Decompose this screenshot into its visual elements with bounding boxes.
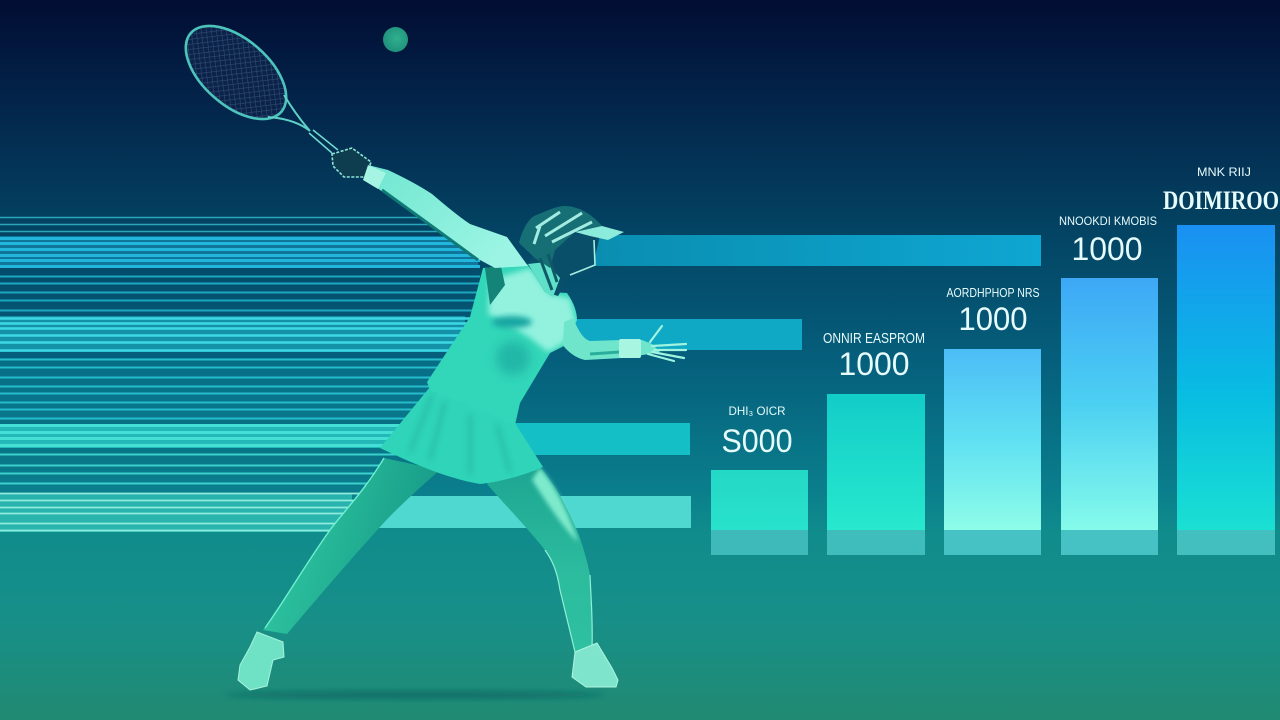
face edge [570, 240, 595, 275]
column 4 [1061, 278, 1158, 555]
tennis ball [383, 27, 408, 52]
ground shadow [225, 691, 605, 699]
wristband [619, 339, 641, 358]
visor [575, 226, 624, 240]
torso [427, 262, 577, 425]
column 1 label: S000 [722, 423, 792, 459]
column 2 label: ONNIR EASPROM [823, 330, 925, 347]
column 1 label [722, 404, 792, 459]
column 4 label [1059, 214, 1157, 267]
column 5 label: MNK RIIJ [1197, 165, 1251, 179]
front shoe [572, 643, 618, 687]
skirt [380, 387, 543, 484]
column 3 label: AORDHPHOP NRS [946, 285, 1040, 300]
front leg [487, 464, 592, 652]
racket arm [366, 165, 528, 268]
face and neck shadow [528, 232, 600, 296]
racket hand [332, 148, 371, 177]
column 5 label [1163, 165, 1279, 215]
column 4 label: NNOOKDI KMOBIS [1059, 214, 1157, 228]
tennis racket [169, 8, 338, 153]
column 3 label: 1000 [958, 301, 1028, 337]
free arm and hand [563, 318, 686, 361]
column 3 label [946, 285, 1040, 337]
column 2 label: 1000 [838, 346, 910, 382]
horizontal bar 1 [595, 235, 1041, 266]
horizontal bar 2 [570, 319, 802, 350]
column chart [711, 225, 1275, 555]
horizontal bar 4 [375, 496, 691, 528]
column 1 label: DHI₃ OICR [728, 404, 786, 418]
back leg [263, 458, 440, 634]
racket wristband [363, 165, 386, 189]
column 4 label: 1000 [1072, 231, 1142, 267]
column 2 label [823, 330, 925, 382]
head [519, 206, 624, 297]
back shoe [238, 632, 284, 690]
column 3 [944, 349, 1041, 555]
racket throat and handle [268, 95, 310, 131]
column 2 [827, 394, 925, 555]
horizontal bar 3 [500, 423, 690, 455]
column 1 [711, 470, 808, 555]
column 5 [1177, 225, 1275, 555]
racket head [169, 8, 303, 137]
speed lines [0, 218, 480, 530]
speed line bands [0, 236, 478, 532]
tennis player [238, 148, 686, 690]
hair [519, 206, 602, 268]
neck highlight [528, 262, 560, 297]
